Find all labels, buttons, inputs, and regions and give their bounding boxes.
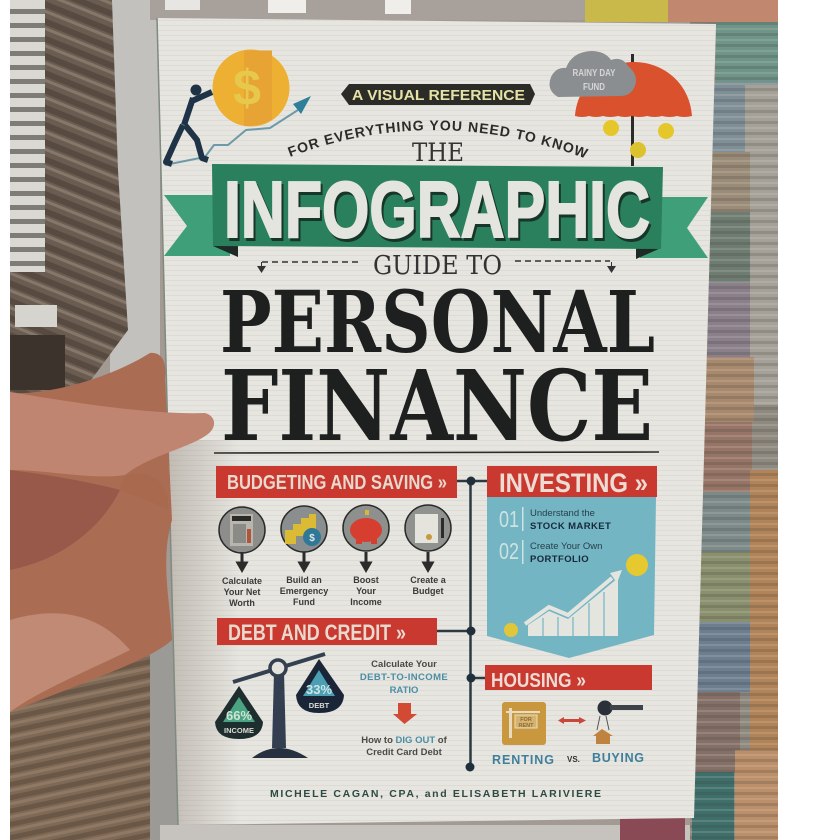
hand holding book <box>10 353 214 712</box>
icon: man pushing coin up rising arrow: $ <box>233 60 261 116</box>
label: boost your income: Boost <box>353 575 379 585</box>
header: debt and credit: DEBT AND CREDIT » <box>228 620 406 645</box>
panel: investing <box>487 466 657 658</box>
text: debt-to-income ratio: Calculate Your <box>371 659 437 670</box>
label: build an emergency fund: Emergency <box>280 586 328 596</box>
list item 01: STOCK MARKET <box>530 521 611 532</box>
label: build an emergency fund: Fund <box>293 597 315 607</box>
icon: rainy day fund umbrella: FUND <box>583 82 605 93</box>
text: dig out of credit card debt: Credit Card Debt <box>366 747 443 758</box>
banner: infographic: INFOGRAPHIC <box>226 168 652 257</box>
timeline connector <box>437 476 487 772</box>
list item 02: PORTFOLIO <box>530 554 589 565</box>
icon: balance scale: DEBT <box>309 701 330 710</box>
list item 01 <box>499 506 611 532</box>
label: calculate your net worth: Calculate <box>222 576 262 586</box>
label: vs.: VS. <box>567 755 580 764</box>
label: boost your income: Your <box>356 586 376 596</box>
icon: for rent sign: FOR <box>520 717 532 723</box>
header: housing: HOUSING » <box>491 670 586 692</box>
header: investing: INVESTING » <box>499 468 648 498</box>
banner: infographic: INFOGRAPHIC <box>224 165 650 254</box>
icon: calculator <box>219 507 265 570</box>
icon: key with house <box>593 700 643 744</box>
icon: for rent sign: RENT <box>519 723 534 729</box>
icon: man pushing coin up rising arrow <box>165 50 311 165</box>
icon: balance scale: 33% <box>306 682 332 697</box>
icon: balance scale <box>215 654 344 758</box>
curved subtitle: FOR EVERYTHING YOU NEED TO KNOW <box>288 120 589 158</box>
list item 01: Understand the <box>530 508 595 519</box>
dashed arrows beside guide to <box>257 261 616 273</box>
heading: guide to: GUIDE TO <box>373 251 502 281</box>
arrow: red down <box>393 703 417 724</box>
heading: personal: PERSONAL <box>220 273 655 373</box>
label: calculate your net worth: Your Net <box>224 587 260 597</box>
badge: a visual reference: A VISUAL REFERENCE <box>352 88 525 104</box>
icon: emergency fund: $ <box>309 533 315 544</box>
icon: balance scale: INCOME <box>224 726 254 735</box>
list item 02 <box>499 538 602 565</box>
icon: balance scale: 66% <box>226 708 252 723</box>
heading: finance: FINANCE <box>221 349 653 463</box>
label: build an emergency fund: Build an <box>286 575 322 585</box>
text: dig out of credit card debt: How to DIG OUT of <box>361 735 447 746</box>
label: create a budget: Budget <box>412 586 444 596</box>
list item 02: Create Your Own <box>530 541 602 552</box>
arrow: double headed red <box>558 717 586 724</box>
icon: rainy day fund umbrella: RAINY DAY <box>572 68 616 79</box>
badge: a visual reference <box>341 84 535 105</box>
list item 01: 01 <box>499 506 519 532</box>
heading: the: THE <box>412 138 464 167</box>
icon: piggy bank <box>343 505 389 570</box>
text: debt-to-income ratio: DEBT-TO-INCOME <box>360 672 448 683</box>
text: debt-to-income ratio: RATIO <box>390 685 418 696</box>
header: housing <box>485 665 652 692</box>
panel: debt and credit <box>215 618 448 758</box>
icon: rainy day fund umbrella <box>550 51 692 166</box>
chart: rising bars and arrow <box>504 554 648 637</box>
divider line <box>214 452 659 453</box>
header: budgeting and saving <box>216 466 457 498</box>
icon: emergency fund <box>281 506 327 570</box>
shield background <box>487 497 656 658</box>
label: renting: RENTING <box>492 753 554 767</box>
icon: for rent sign <box>502 702 546 745</box>
label: boost your income: Income <box>350 597 382 607</box>
header: budgeting and saving: BUDGETING AND SAVING » <box>227 472 447 494</box>
panel: budgeting and saving <box>216 466 457 608</box>
authors: MICHELE CAGAN, CPA, and ELISABETH LARIVIERE <box>270 788 601 800</box>
label: create a budget: Create a <box>410 575 447 585</box>
icon: budget document <box>405 505 451 570</box>
book cover <box>157 18 716 825</box>
list item 02: 02 <box>499 538 519 564</box>
panel: housing <box>485 665 652 767</box>
label: calculate your net worth: Worth <box>229 598 255 608</box>
label: buying: BUYING <box>592 751 644 765</box>
